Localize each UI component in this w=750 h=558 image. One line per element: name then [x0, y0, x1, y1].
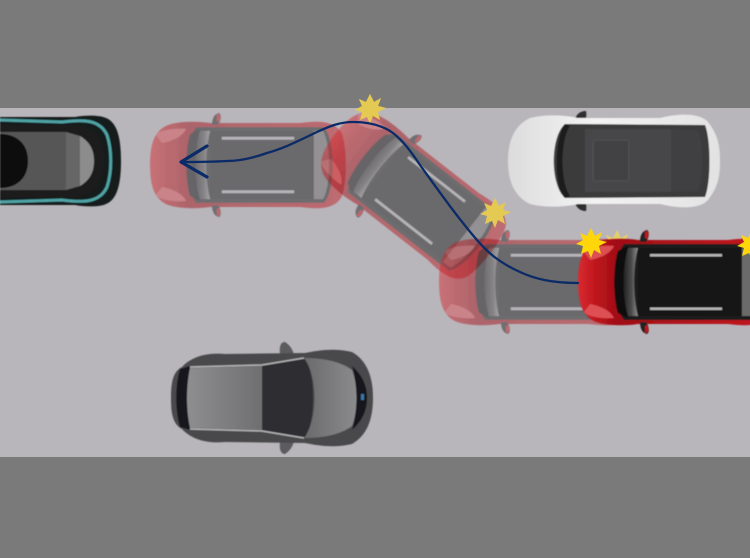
ghost car: final position	[150, 113, 346, 217]
parking lane	[0, 108, 750, 457]
ghost car: start position	[439, 230, 635, 334]
solid star: rear contact at page edge	[737, 230, 750, 260]
arrow: parking path	[181, 122, 578, 283]
parked car: grey, opposite side of lane	[171, 342, 373, 454]
solid red car: current position	[578, 230, 750, 334]
parked car: white, rear of lane	[508, 111, 720, 211]
road surface top	[0, 0, 750, 108]
ghost star: contact at upper kerb, front layer	[355, 94, 386, 124]
ghost car: angled mid position	[303, 93, 521, 295]
partial star behind red car	[602, 230, 633, 260]
ghost star: hidden behind angled car	[438, 228, 469, 258]
solid star: front left contact	[576, 228, 607, 258]
road surface bottom	[0, 457, 750, 558]
parked car: teal, front of lane	[0, 116, 121, 206]
ghost star: rear corner of angled car	[480, 198, 511, 228]
ghost star: contact at upper kerb	[355, 94, 386, 124]
